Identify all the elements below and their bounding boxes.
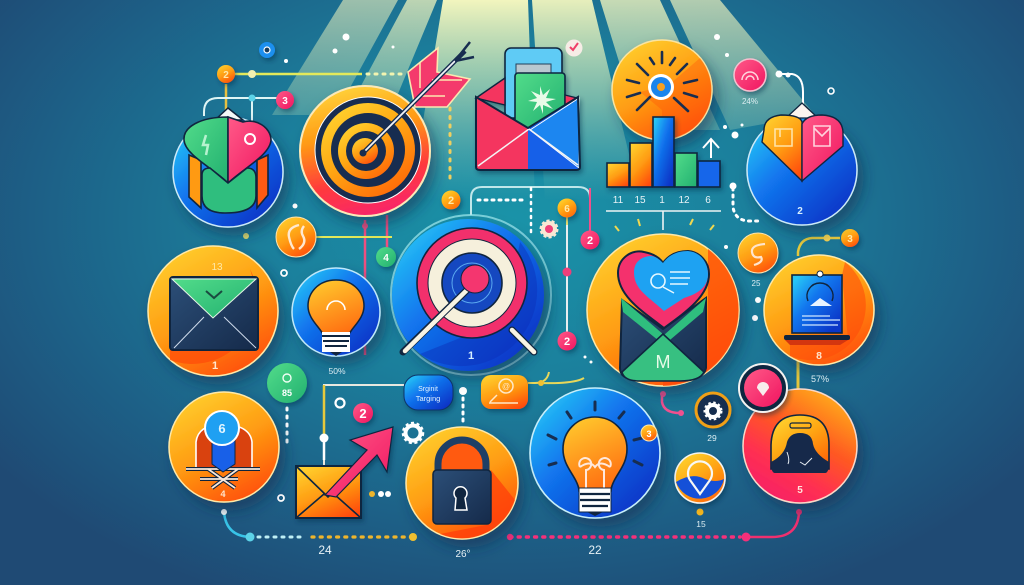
check badge [566,40,582,56]
panel: red circle with dome icon: 5 [797,485,803,496]
small dots [221,34,830,542]
pin badge with 15 [675,453,725,529]
panel: left shield heart icon [173,108,283,227]
gear badge with 29 [696,393,730,443]
panel: right envelope circle: 2 [797,206,803,217]
small blue dot icon [259,42,275,58]
panel: central target: 1 [468,350,474,362]
panel: laptop circle [764,255,874,384]
badge: 2 near target: 2 [448,195,454,207]
badge: green 4 [376,247,396,267]
gear badge with 29: 29 [707,433,717,443]
panel: bulb circle: 50% [328,366,346,376]
badge: pink 2 right of centre bottom: 2 [564,336,570,348]
label: 24: 24 [318,543,332,557]
bar chart: 12 [678,195,690,206]
badge: pink 2 below bulb: 2 [359,406,367,421]
Sprint Targeting cloud label: Targing [416,394,440,403]
panel: envelope with rising arrow [296,427,393,518]
arrow [360,42,474,156]
pink ring badge [739,364,787,412]
gear icon [403,423,423,443]
panel: bulb circle [292,268,380,376]
badge: pink 2 right of centre top [580,230,600,250]
panel: laptop circle: 57% [811,374,829,384]
badge: 3 top right: 3 [847,234,853,245]
badge: 3 top left [276,91,294,109]
bar chart: 6 [705,195,711,206]
orange email badge: @ [502,382,510,391]
panel: ribbon badge circle [169,392,279,502]
panel: central target [391,215,551,375]
panel: right envelope circle [747,103,857,225]
panel: lock circle [406,427,518,560]
panel: laptop circle: 8 [816,350,822,362]
panel: lock circle: 26° [455,549,471,560]
panel: heart mail [587,234,739,386]
connector lines and dots [204,74,840,537]
panel: target with arrow [300,42,474,216]
panel: mail circle: 13 [211,262,223,273]
light rays [272,0,815,200]
panel: heart mail: M [656,352,670,372]
panel: sun circle [612,40,712,140]
flower icon [541,221,557,237]
bar chart: 1 [659,195,665,206]
badge: 2 top left: 2 [223,70,229,81]
orange email badge [481,375,528,409]
badge: pink 2 right of centre bottom [558,332,576,350]
orange swirl badge with 25 [738,233,778,288]
panel: large bulb circle [530,388,660,518]
badge: 6 [558,198,576,218]
badge: 6: 6 [564,204,570,215]
bar chart [606,117,721,231]
badge: 2 top left [217,65,235,83]
green 85 badge [267,363,307,403]
badge: pink 2 below bulb [353,403,373,423]
green 85 badge: 85 [282,388,292,398]
orange swirl badge with 25: 25 [752,279,761,288]
Sprint Targeting cloud label: Srginit [418,386,438,393]
badge: green 4: 4 [383,253,389,264]
panel: envelope with cards [476,48,580,170]
bar chart: 15 [634,195,646,206]
Sprint Targeting cloud label [404,375,453,410]
panel: mail circle [148,246,278,376]
wifi badge with 24% label [734,59,766,106]
badge: pink 2 right of centre top: 2 [587,235,593,247]
panel: large bulb circle: 3 [646,429,652,439]
wifi badge with 24% label: 24% [742,97,758,106]
panel: red circle with dome icon [743,389,857,503]
badge: 2 near target [442,190,460,210]
panel: mail circle: 1 [212,360,218,372]
panel: ribbon badge circle: 6 [218,421,226,436]
label: 22: 22 [588,543,602,557]
pin badge with 15: 15 [696,519,706,529]
badge: 3 top left: 3 [282,96,288,107]
badge: 3 top right [841,229,859,247]
bar chart: 11 [613,195,624,206]
swirl badge [276,217,316,257]
panel: ribbon badge circle: 4 [220,489,226,499]
